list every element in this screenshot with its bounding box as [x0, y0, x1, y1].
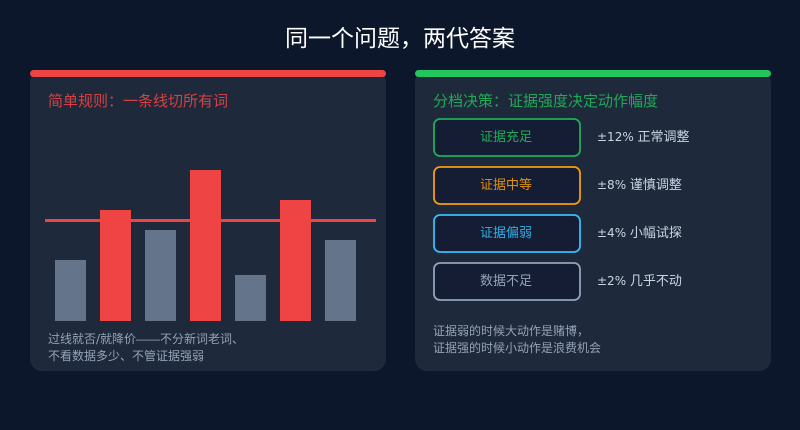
tier: medium evidence [434, 167, 682, 204]
caption: tiered decision: 证据弱的时候大动作是赌博， [433, 323, 589, 338]
tier: medium evidence: 证据中等 [480, 177, 532, 193]
bar chart [45, 170, 376, 321]
panel accent bar: green [415, 70, 771, 77]
tier: weak evidence [434, 215, 682, 252]
panel heading: tiered decision: 分档决策：证据强度决定动作幅度 [433, 92, 658, 110]
tier: sufficient evidence: ±12% 正常调整 [597, 130, 690, 145]
panel: simple rule [30, 70, 386, 371]
tier: medium evidence: ±8% 谨慎调整 [597, 178, 682, 193]
tier: weak evidence: 证据偏弱 [480, 226, 532, 241]
panel: tiered decision [415, 70, 771, 371]
tier: sufficient evidence: 证据充足 [480, 129, 532, 145]
tier: weak evidence: ±4% 小幅试探 [597, 226, 682, 241]
tier: sufficient evidence [434, 119, 690, 156]
tier: insufficient data: ±2% 几乎不动 [597, 274, 682, 289]
caption: simple rule: 不看数据多少、不管证据强弱 [48, 348, 204, 363]
title: 同一个问题，两代答案 [285, 26, 515, 52]
tier: insufficient data: 数据不足 [480, 274, 532, 289]
caption: tiered decision: 证据强的时候小动作是浪费机会 [433, 340, 601, 355]
caption: simple rule: 过线就否/就降价——不分新词老词、 [48, 332, 244, 346]
panel heading: simple rule: 简单规则：一条线切所有词 [48, 92, 228, 110]
panel accent bar: red [30, 70, 386, 77]
tier: insufficient data [434, 263, 682, 300]
